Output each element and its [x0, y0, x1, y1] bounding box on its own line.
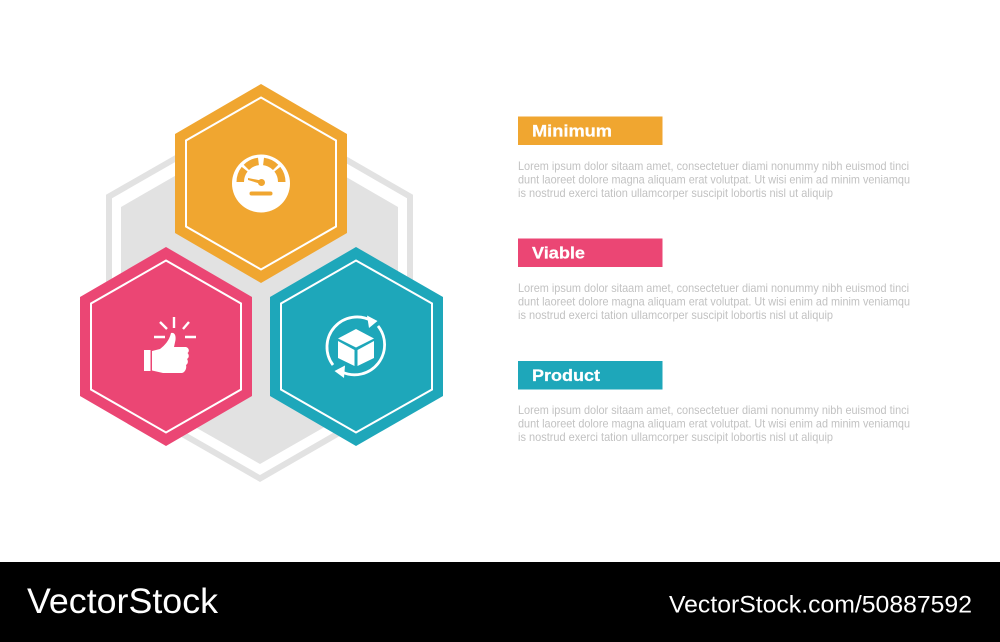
label: Minimum: Minimum — [532, 122, 612, 140]
icon: speedometer gauge — [232, 154, 290, 212]
description text: Lorem ipsum dolor sitaam amet, consectetuer diami nonummy nibh euismod tinci — [518, 403, 909, 417]
label: Minimum — [518, 116, 662, 145]
description text: is nostrud exerci tation ullamcorper suscipit lobortis nisl ut aliquip — [518, 308, 833, 322]
description text — [518, 159, 910, 200]
block: Viable — [518, 238, 910, 322]
icon: box with cycle arrows — [327, 316, 385, 378]
description text: is nostrud exerci tation ullamcorper suscipit lobortis nisl ut aliquip — [518, 430, 833, 444]
hexagon: Viable (pink) — [80, 247, 252, 446]
footer bar — [0, 562, 1000, 642]
label: Product — [518, 361, 662, 390]
description text: Lorem ipsum dolor sitaam amet, consectetuer diami nonummy nibh euismod tinci — [518, 281, 909, 295]
icon: thumbs up — [144, 317, 196, 373]
description text: dunt laoreet dolore magna aliquam erat volutpat. Ut wisi enim ad minim veniamqu — [518, 172, 910, 186]
description text: dunt laoreet dolore magna aliquam erat volutpat. Ut wisi enim ad minim veniamqu — [518, 416, 910, 430]
label: Product: Product — [532, 366, 600, 385]
block: Minimum — [518, 116, 910, 200]
hexagon: Product (teal) — [270, 247, 443, 446]
description text — [518, 403, 910, 444]
label: Viable — [518, 238, 662, 267]
background hexagon — [109, 110, 410, 478]
hexagon: Minimum (orange) — [175, 84, 347, 283]
block: Product — [518, 361, 910, 444]
description text: Lorem ipsum dolor sitaam amet, consectetuer diami nonummy nibh euismod tinci — [518, 159, 909, 173]
description text: is nostrud exerci tation ullamcorper suscipit lobortis nisl ut aliquip — [518, 186, 833, 200]
footer url text: VectorStock.com/50887592 — [669, 592, 972, 618]
description text: dunt laoreet dolore magna aliquam erat volutpat. Ut wisi enim ad minim veniamqu — [518, 294, 910, 308]
description text — [518, 281, 910, 322]
label: Viable: Viable — [532, 244, 585, 262]
footer logo text: VectorStock — [27, 582, 219, 621]
